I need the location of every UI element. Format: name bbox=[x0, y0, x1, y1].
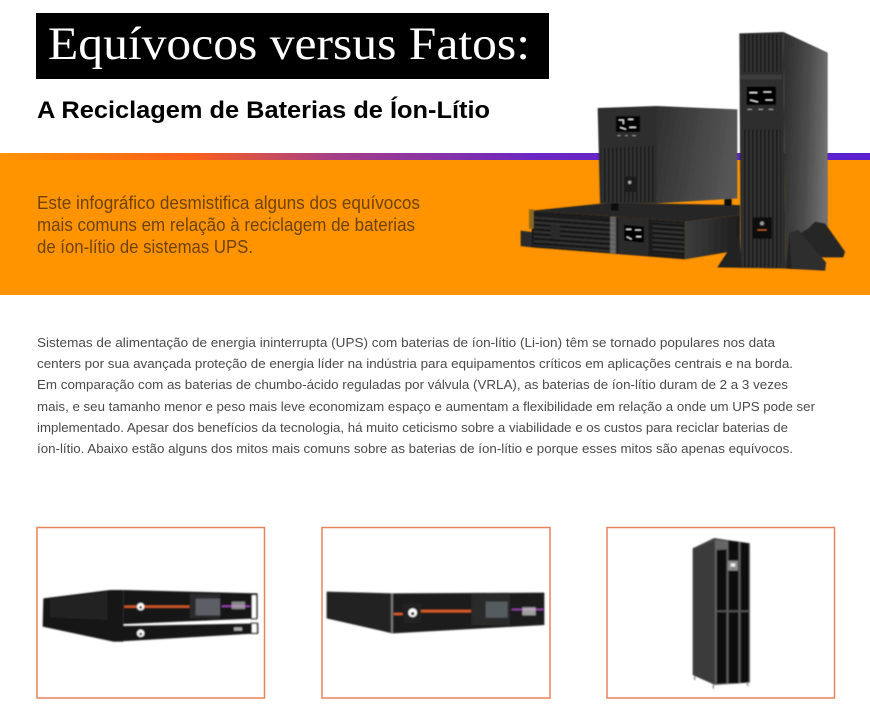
two-unit rack UPS bbox=[43, 590, 258, 642]
banner intro text: Este infográfico desmistifica alguns dos equívocos bbox=[37, 193, 420, 213]
subtitle: A Reciclagem de Baterias de Íon-Lítio bbox=[37, 96, 490, 124]
desktop tower UPS bbox=[598, 106, 737, 211]
banner intro text: de íon-lítio de sistemas UPS. bbox=[37, 237, 253, 257]
banner intro text bbox=[37, 193, 420, 257]
body paragraph: Em comparação com as baterias de chumbo-ácido reguladas por válvula (VRLA), as baterias de íon-lítio duram de 2 a 3 vezes bbox=[37, 377, 789, 392]
body paragraph: mais, e seu tamanho menor e peso mais leve economizam espaço e aumentam a flexibilidade em relação a onde um UPS pode ser bbox=[37, 399, 816, 414]
low rack UPS bbox=[521, 203, 740, 259]
product card 1 bbox=[37, 528, 264, 698]
body paragraph: íon-lítio. Abaixo estão alguns dos mitos mais comuns sobre as baterias de íon-lítio e porque esses mitos são apenas equívocos. bbox=[37, 441, 793, 456]
gradient strip bbox=[0, 153, 870, 160]
hero image: UPS products bbox=[521, 32, 845, 271]
body paragraph: centers por sua avançada proteção de energia líder na indústria para equipamentos críticos em aplicações centrais e na borda. bbox=[37, 356, 793, 371]
banner intro text: mais comuns em relação à reciclagem de baterias bbox=[37, 215, 415, 235]
product card 3 bbox=[607, 528, 834, 698]
single rack UPS bbox=[327, 592, 544, 633]
body paragraph: implementado. Apesar dos benefícios da tecnologia, há muito ceticismo sobre a viabilidade e os custos para reciclar baterias de bbox=[37, 420, 788, 435]
title: Equívocos versus Fatos: bbox=[48, 18, 530, 70]
body paragraph bbox=[37, 335, 816, 456]
rack tower UPS bbox=[717, 32, 845, 271]
panel: orange banner bbox=[0, 153, 870, 295]
floor-standing UPS cabinet bbox=[693, 538, 750, 689]
body paragraph: Sistemas de alimentação de energia ininterrupta (UPS) com baterias de íon-lítio (Li-ion) têm se tornado populares nos data bbox=[37, 335, 776, 350]
product card 2 bbox=[322, 528, 550, 698]
tower feet bbox=[717, 222, 845, 271]
